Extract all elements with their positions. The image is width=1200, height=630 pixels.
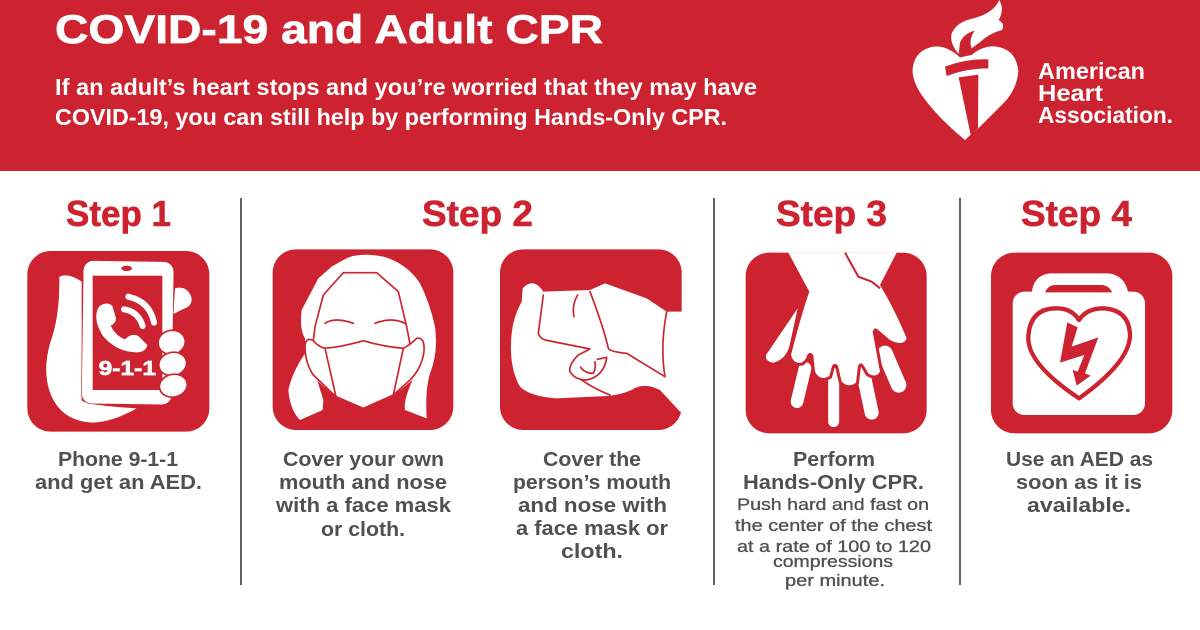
intro text: If an adult’s heart stops and you’re worried that they may have (55, 74, 757, 100)
step 3 details: per minute. (785, 572, 885, 590)
step 4 text (1006, 448, 1153, 517)
step 2 first text: with a face mask (275, 494, 452, 517)
step 3 details (735, 496, 932, 590)
step 2 second text: Cover the (543, 448, 641, 471)
step 4 text: Use an AED as (1006, 448, 1153, 471)
step 4 heading: Step 4 (1021, 193, 1132, 234)
icon: AED case with heart and lightning bolt (991, 253, 1172, 433)
step 1 text: and get an AED. (35, 471, 202, 494)
step 2 second text: person’s mouth (513, 471, 671, 494)
step 3 details: compressions (773, 553, 893, 571)
step 2 second text (513, 448, 671, 563)
logo wordmark: Heart (1038, 80, 1103, 106)
step 3 details: the center of the chest (735, 517, 932, 535)
step 3 details: Push hard and fast on (737, 496, 929, 514)
intro text: COVID-19, you can still help by performing Hands-Only CPR. (55, 104, 727, 130)
logo wordmark: American (1038, 58, 1145, 84)
step 2 first text: Cover your own (283, 448, 444, 471)
step 3 action (743, 448, 924, 494)
logo wordmark: Association. (1038, 102, 1173, 128)
logo wordmark (1038, 58, 1173, 128)
title: COVID-19 and Adult CPR (55, 8, 603, 52)
step 2 first text: mouth and nose (279, 471, 447, 494)
step 3 action: Hands-Only CPR. (743, 471, 924, 494)
step 2 second text: a face mask or (516, 517, 668, 540)
step 3 details: at a rate of 100 to 120 (737, 538, 931, 556)
step 2 heading: Step 2 (422, 193, 533, 234)
step 1 text: Phone 9-1-1 (58, 448, 178, 471)
step 1 text (35, 448, 202, 494)
icon: American Heart Association heart and torch logo (913, 0, 1018, 140)
icon: person wearing a face mask (273, 249, 453, 430)
step 2 first text: or cloth. (321, 518, 405, 541)
step 4 text: soon as it is (1016, 471, 1142, 494)
step 4 text: available. (1027, 494, 1131, 517)
intro text (55, 74, 757, 130)
step 3 heading: Step 3 (776, 193, 887, 234)
icon: person lying down with face covered (500, 249, 687, 430)
icon: hand holding phone dialing 9-1-1 (27, 251, 209, 432)
header banner (0, 0, 1200, 171)
icon: hands performing chest compressions (746, 245, 927, 433)
step 3 text (735, 448, 932, 590)
step 2 second text: cloth. (561, 540, 623, 563)
step 2 second text: and nose with (518, 494, 667, 517)
icon: hand holding phone dialing 9-1-1: 9-1-1 (99, 357, 156, 380)
step 2 first text (275, 448, 452, 541)
step 3 action: Perform (793, 448, 875, 471)
step 1 heading: Step 1 (66, 193, 171, 234)
